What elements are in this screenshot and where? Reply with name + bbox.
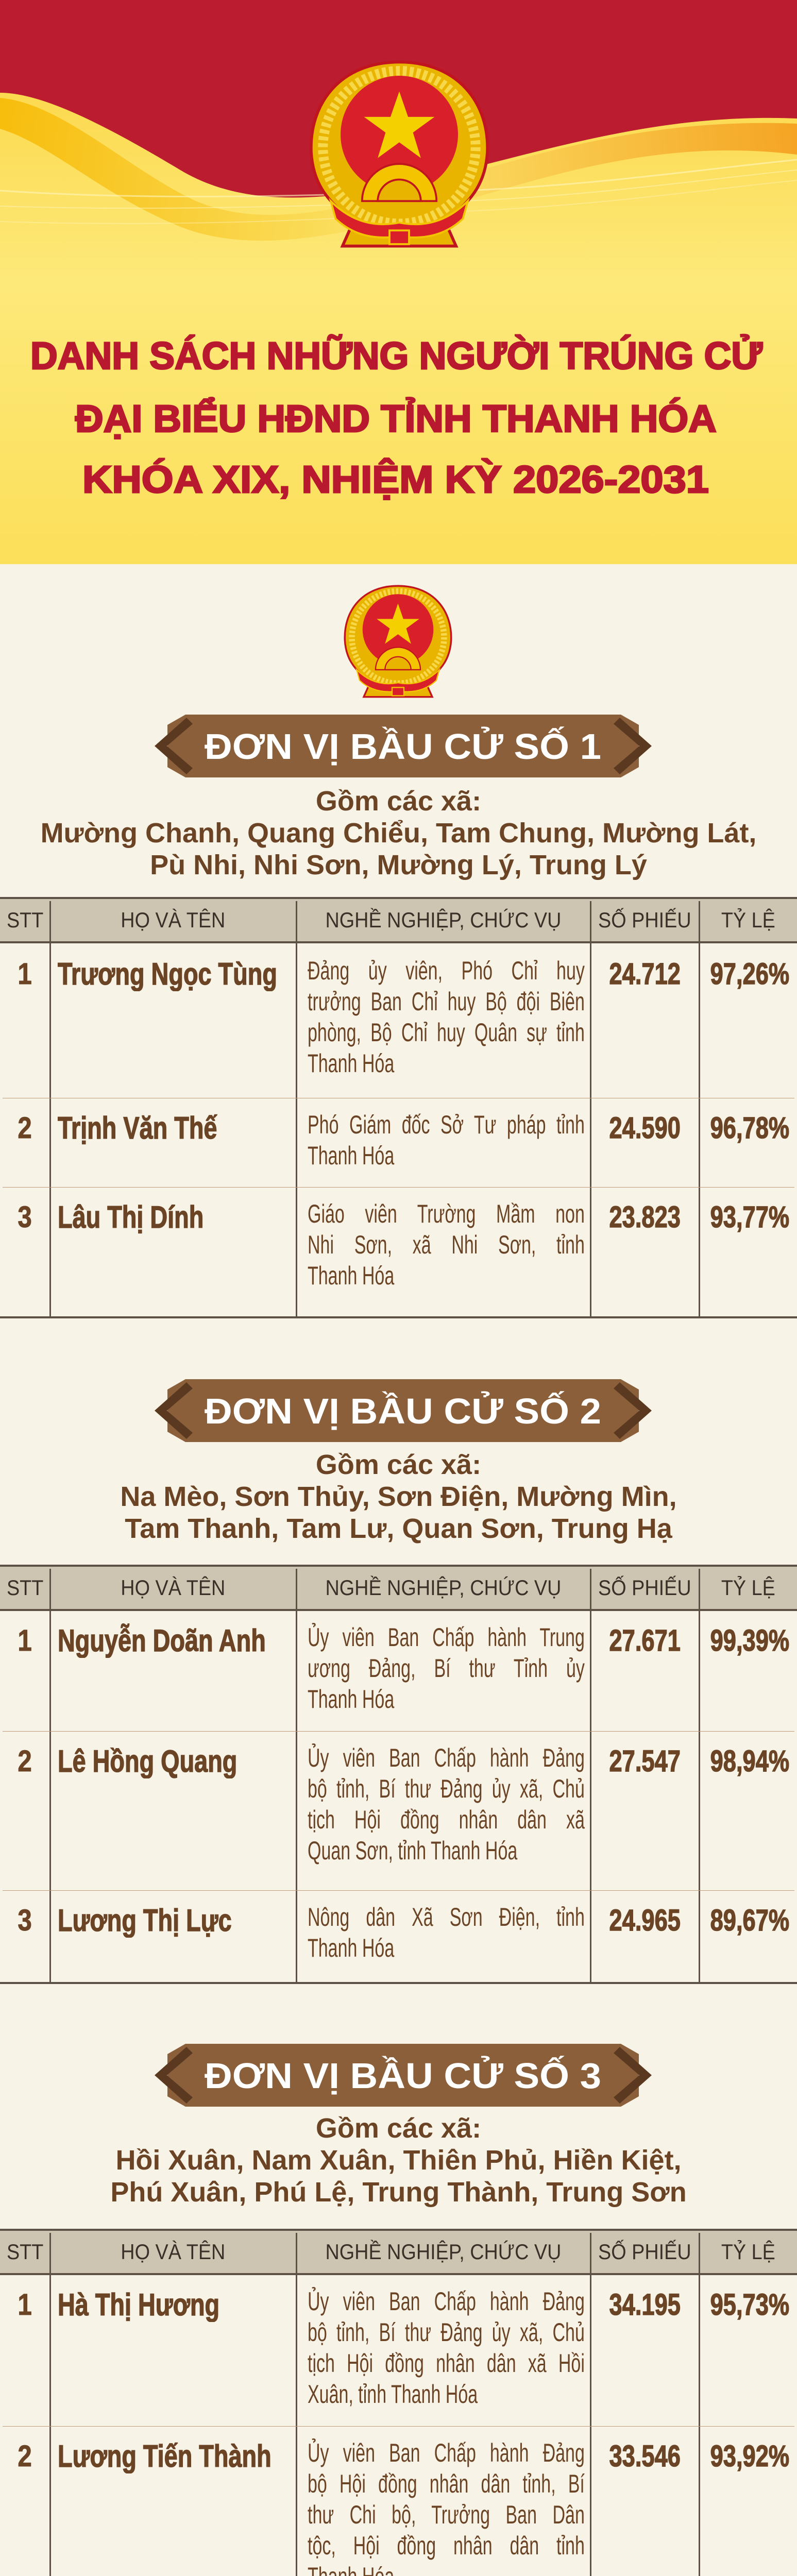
row 2: tộc, Hội đồng nhân dân tỉnh xyxy=(308,2531,585,2560)
row 2: Quan Sơn, tỉnh Thanh Hóa xyxy=(308,1836,517,1865)
table: section 1: STT xyxy=(7,908,43,932)
table: section 3: TỶ LỆ xyxy=(721,2240,775,2264)
row 2: Lê Hồng Quang xyxy=(58,1744,237,1778)
row 2: 93,92% xyxy=(710,2439,789,2473)
row 2: 96,78% xyxy=(710,1111,789,1145)
row 3: 24.965 xyxy=(609,1904,681,1937)
table: section 3: STT xyxy=(7,2240,43,2264)
row 1: 97,26% xyxy=(710,957,789,991)
communes: section 2: Tam Thanh, Tam Lư, Quan Sơn, Trung Hạ xyxy=(125,1513,672,1544)
table: section 1: HỌ VÀ TÊN xyxy=(121,908,226,932)
emblem: section 1 xyxy=(344,585,452,698)
table: section 1: TỶ LỆ xyxy=(721,908,775,932)
row 1: Ủy viên Ban Chấp hành Trung xyxy=(308,1623,585,1652)
table: section 1: SỐ PHIẾU xyxy=(598,908,691,932)
row 3: 93,77% xyxy=(710,1200,789,1234)
title xyxy=(30,334,764,501)
row 2: 2 xyxy=(18,1744,32,1778)
row 1: trưởng Ban Chỉ huy Bộ đội Biên xyxy=(308,987,585,1016)
row 3: Nhi Sơn, xã Nhi Sơn, tỉnh xyxy=(308,1230,585,1259)
row 1: 34.195 xyxy=(609,2288,681,2321)
table: section 3: HỌ VÀ TÊN xyxy=(121,2240,226,2264)
row 3: Thanh Hóa xyxy=(308,1261,394,1290)
banner: section 1 xyxy=(155,715,652,777)
communes: section 2: Na Mèo, Sơn Thủy, Sơn Điện, Mường Mìn, xyxy=(120,1481,677,1512)
row 2: Ủy viên Ban Chấp hành Đảng xyxy=(308,2438,585,2467)
row 2: bộ tỉnh, Bí thư Đảng ủy xã, Chủ xyxy=(308,1774,585,1803)
banner: section 2 xyxy=(155,1379,652,1442)
row 1: bộ tỉnh, Bí thư Đảng ủy xã, Chủ xyxy=(308,2318,585,2347)
row 1 xyxy=(18,956,789,1078)
row 1: Đảng ủy viên, Phó Chỉ huy xyxy=(308,956,585,985)
table: section 3: NGHỀ NGHIỆP, CHỨC VỤ xyxy=(326,2240,561,2264)
row 3 xyxy=(18,1199,789,1290)
table: section 1 xyxy=(0,897,797,1318)
title: KHÓA XIX, NHIỆM KỲ 2026-2031 xyxy=(82,458,709,501)
row 1: Xuân, tỉnh Thanh Hóa xyxy=(308,2380,478,2409)
banner: section 3 xyxy=(155,2044,652,2107)
row 2: Trịnh Văn Thế xyxy=(58,1111,217,1145)
row 1: tịch Hội đồng nhân dân xã Hồi xyxy=(308,2349,585,2378)
communes: section 1: Mường Chanh, Quang Chiểu, Tam Chung, Mường Lát, xyxy=(41,818,756,849)
row 2: thư Chi bộ, Trưởng Ban Dân xyxy=(308,2500,585,2529)
row 1: 27.671 xyxy=(609,1624,681,1657)
table: section 2: SỐ PHIẾU xyxy=(598,1575,691,1600)
row 2: tịch Hội đồng nhân dân xã xyxy=(308,1805,585,1834)
row 3: Nông dân Xã Sơn Điện, tỉnh xyxy=(308,1903,585,1931)
row 3: 23.823 xyxy=(609,1200,681,1234)
row 1: Thanh Hóa xyxy=(308,1685,394,1714)
header banner xyxy=(0,0,797,564)
row 1: 99,39% xyxy=(710,1624,789,1657)
communes: section 2 xyxy=(120,1449,677,1544)
table: section 2 xyxy=(0,1565,797,1984)
banner: section 3: ĐƠN VỊ BẦU CỬ SỐ 3 xyxy=(205,2055,601,2096)
row 3: 3 xyxy=(18,1904,32,1937)
row 1: 24.712 xyxy=(609,957,681,991)
row 2: 2 xyxy=(18,1111,32,1145)
table: section 2: TỶ LỆ xyxy=(721,1575,775,1600)
banner: section 2: ĐƠN VỊ BẦU CỬ SỐ 2 xyxy=(205,1391,601,1431)
communes: section 3: Gồm các xã: xyxy=(316,2113,481,2144)
row 2: 33.546 xyxy=(609,2439,681,2473)
row 3: 3 xyxy=(18,1200,32,1234)
row 3: Thanh Hóa xyxy=(308,1934,394,1962)
table: section 3: SỐ PHIẾU xyxy=(598,2240,691,2264)
banner: section 1: ĐƠN VỊ BẦU CỬ SỐ 1 xyxy=(205,726,601,767)
communes: section 1 xyxy=(41,786,756,880)
row 1: Nguyễn Doãn Anh xyxy=(58,1623,266,1658)
row 1: Ủy viên Ban Chấp hành Đảng xyxy=(308,2287,585,2316)
row 1: 1 xyxy=(18,2288,32,2321)
row 3 xyxy=(18,1903,789,1962)
table: section 2: NGHỀ NGHIỆP, CHỨC VỤ xyxy=(326,1575,561,1600)
title: ĐẠI BIỂU HĐND TỈNH THANH HÓA xyxy=(75,397,717,440)
title: DANH SÁCH NHỮNG NGƯỜI TRÚNG CỬ xyxy=(30,334,763,377)
row 2: Thanh Hóa xyxy=(308,1141,394,1170)
row 2: Phó Giám đốc Sở Tư pháp tỉnh xyxy=(308,1110,585,1139)
row 1: 1 xyxy=(18,957,32,991)
table: section 2: STT xyxy=(7,1575,43,1600)
row 2: bộ Hội đồng nhân dân tỉnh, Bí xyxy=(308,2469,585,2498)
row 3: 89,67% xyxy=(710,1904,789,1937)
communes: section 2: Gồm các xã: xyxy=(316,1449,481,1480)
row 2 xyxy=(18,2438,789,2576)
row 2 xyxy=(18,1110,789,1170)
row 2: 27.547 xyxy=(609,1744,681,1778)
row 1: Hà Thị Hương xyxy=(58,2287,219,2322)
row 1: Trương Ngọc Tùng xyxy=(58,957,277,991)
table: section 2: HỌ VÀ TÊN xyxy=(121,1575,226,1600)
row 2 xyxy=(18,1743,789,1865)
row 2: Lương Tiến Thành xyxy=(58,2439,272,2473)
table: section 1: NGHỀ NGHIỆP, CHỨC VỤ xyxy=(326,908,561,932)
row 3: Lâu Thị Dính xyxy=(58,1200,204,1234)
row 2: Ủy viên Ban Chấp hành Đảng xyxy=(308,1743,585,1772)
emblem: header xyxy=(310,61,489,247)
row 1 xyxy=(18,1623,789,1714)
communes: section 3: Phú Xuân, Phú Lệ, Trung Thành, Trung Sơn xyxy=(110,2177,687,2208)
row 1: 95,73% xyxy=(710,2288,789,2321)
row 1: phòng, Bộ Chỉ huy Quân sự tỉnh xyxy=(308,1018,585,1047)
row 1: Thanh Hóa xyxy=(308,1049,394,1078)
row 2: 24.590 xyxy=(609,1111,681,1145)
row 1: 1 xyxy=(18,1624,32,1657)
communes: section 3: Hồi Xuân, Nam Xuân, Thiên Phủ, Hiền Kiệt, xyxy=(115,2145,682,2176)
row 3: Giáo viên Trường Mầm non xyxy=(308,1199,585,1228)
row 1 xyxy=(18,2287,789,2409)
row 2: 98,94% xyxy=(710,1744,789,1778)
table: section 3 xyxy=(0,2229,797,2576)
communes: section 1: Gồm các xã: xyxy=(316,786,481,817)
communes: section 3 xyxy=(110,2113,687,2208)
row 1: ương Đảng, Bí thư Tỉnh ủy xyxy=(308,1654,585,1683)
communes: section 1: Pù Nhi, Nhi Sơn, Mường Lý, Trung Lý xyxy=(150,850,647,880)
row 2: 2 xyxy=(18,2439,32,2473)
row 3: Lương Thị Lực xyxy=(58,1903,232,1938)
